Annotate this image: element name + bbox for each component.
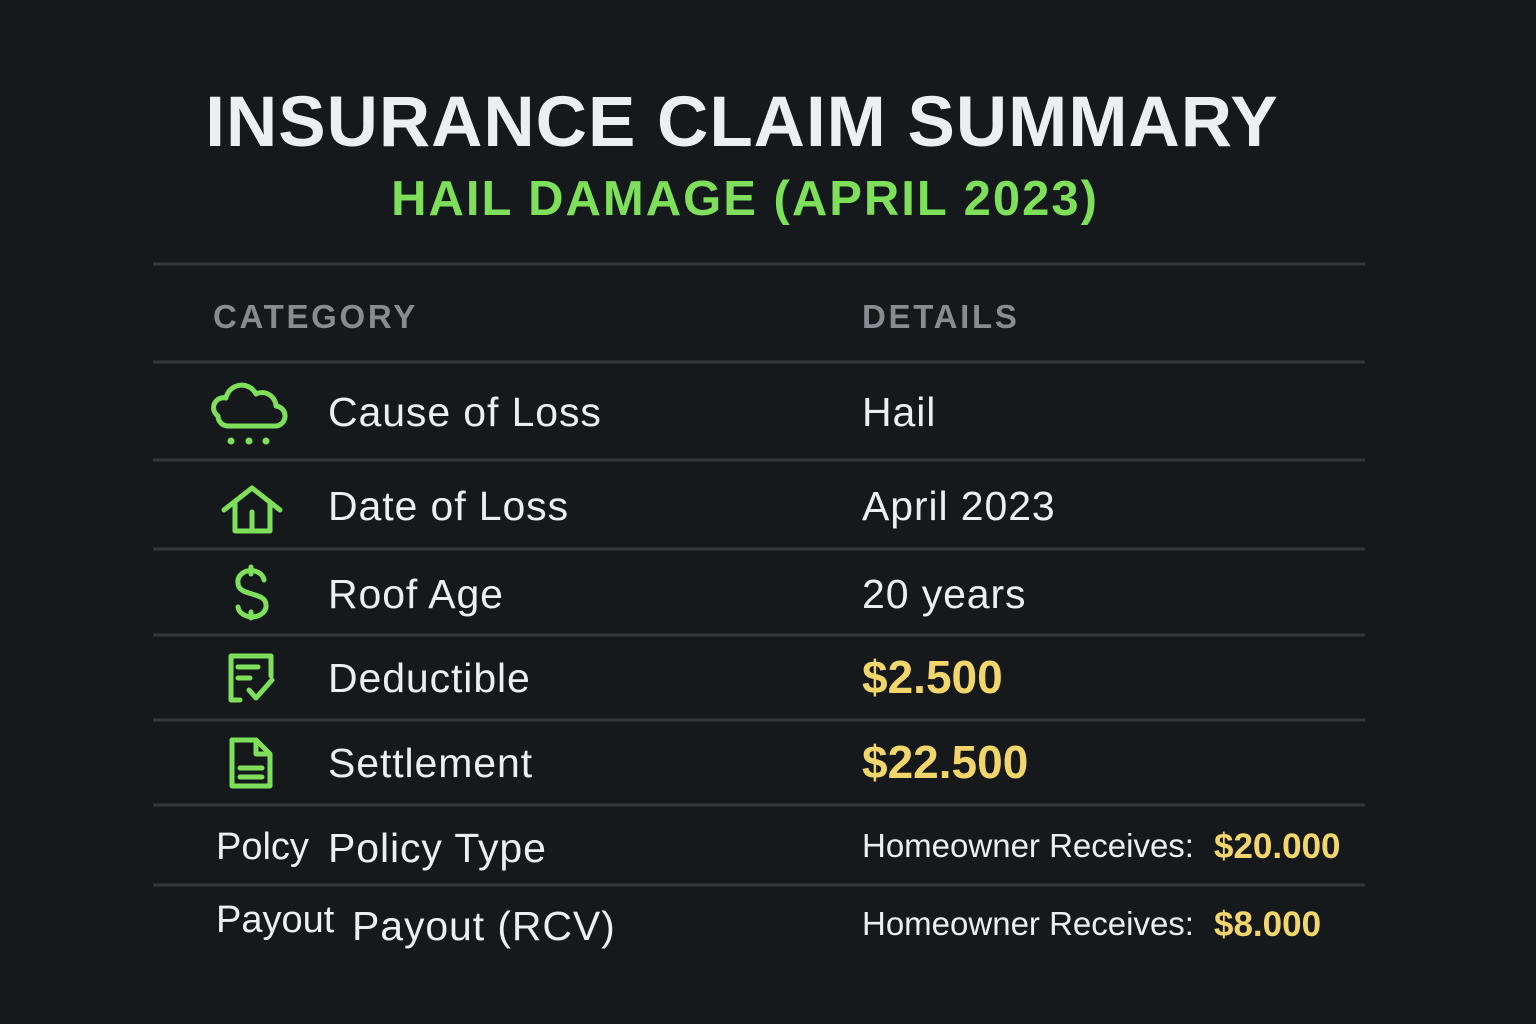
row: settlement: Settlement (328, 740, 533, 786)
icon: dollar (238, 567, 266, 618)
row: policy type (216, 825, 1341, 871)
row: cause of loss (214, 385, 936, 444)
row: payout: Payout (RCV) (352, 903, 616, 949)
row: cause of loss: Cause of Loss (328, 389, 602, 435)
row: roof age: Roof Age (328, 571, 504, 617)
row: payout: Payout (216, 899, 335, 941)
icon: house (224, 488, 280, 531)
row: deductible (231, 651, 1003, 703)
icon: hail cloud (214, 385, 285, 444)
row: date of loss: April 2023 (862, 483, 1056, 529)
row: deductible: $2.500 (862, 651, 1003, 703)
row: roof age (238, 567, 1026, 618)
row: settlement: $22.500 (862, 736, 1028, 788)
row: date of loss (224, 483, 1056, 531)
row: roof age: 20 years (862, 571, 1026, 617)
subtitle: HAIL DAMAGE (APRIL 2023) (391, 172, 1099, 226)
table header: CATEGORY (213, 298, 418, 335)
title: INSURANCE CLAIM SUMMARY (205, 83, 1279, 162)
row: policy type: Policy Type (328, 825, 547, 871)
row: policy type: Polcy (216, 826, 309, 868)
row: policy type: $20.000 (1214, 827, 1341, 866)
row: payout: $8.000 (1214, 905, 1321, 944)
table header: DETAILS (862, 298, 1020, 335)
icon: checklist (231, 656, 272, 700)
row: date of loss: Date of Loss (328, 483, 569, 529)
table header (213, 298, 1020, 335)
icon: document (232, 740, 270, 786)
row: deductible: Deductible (328, 655, 531, 701)
row: cause of loss: Hail (862, 389, 936, 435)
row: policy type: Homeowner Receives: (862, 827, 1194, 864)
row: settlement (232, 736, 1028, 788)
row: payout (216, 899, 1321, 949)
row: payout: Homeowner Receives: (862, 905, 1194, 942)
